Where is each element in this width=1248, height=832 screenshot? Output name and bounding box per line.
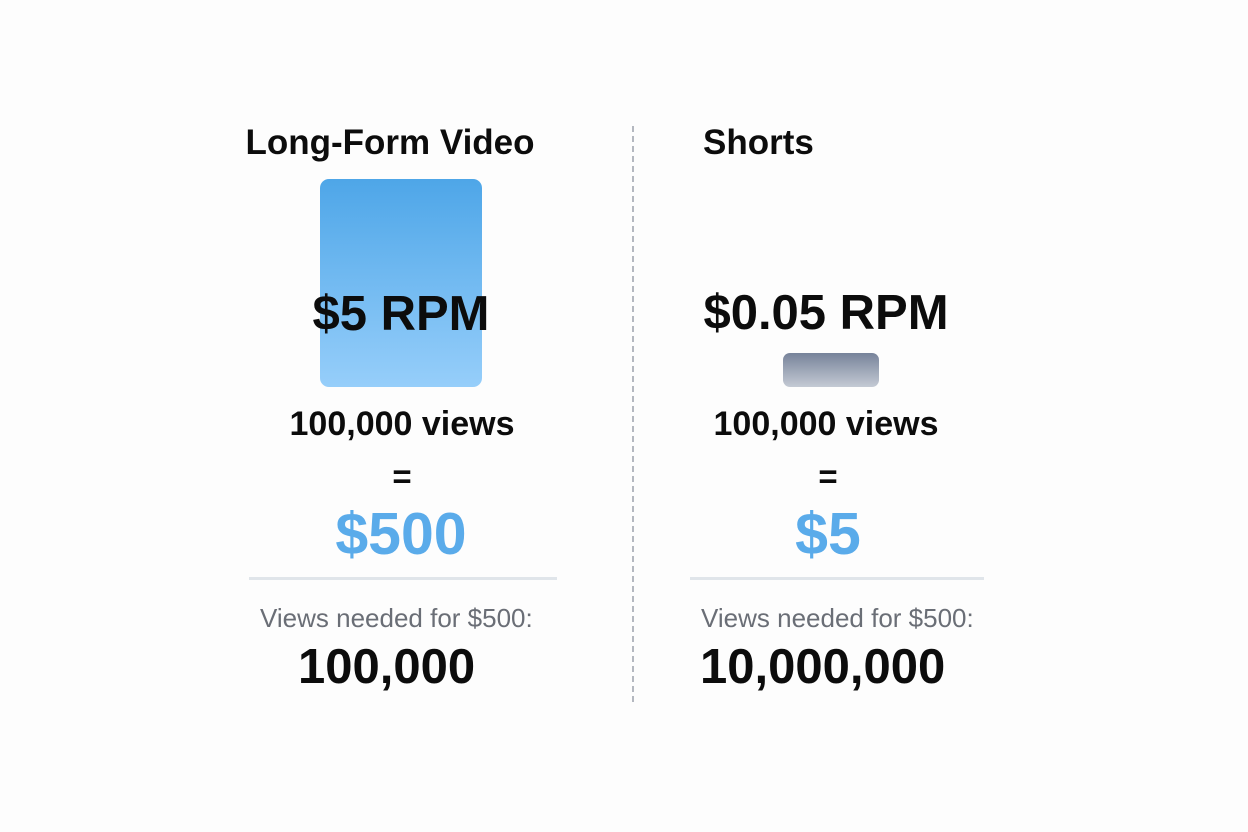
bar: shorts RPM	[783, 353, 879, 387]
views needed value: 10,000,000	[700, 640, 945, 694]
RPM label: $0.05 RPM	[703, 286, 949, 340]
heading: shorts: Shorts	[703, 123, 814, 162]
divider line	[249, 577, 557, 580]
views needed label: Views needed for $500:	[701, 603, 974, 633]
earnings: $5	[795, 501, 861, 567]
panel: long-form	[245, 123, 557, 694]
views needed label: Views needed for $500:	[260, 603, 533, 633]
views needed value: 100,000	[298, 640, 475, 694]
divider line	[690, 577, 984, 580]
bar: long-form RPM	[320, 179, 482, 387]
equals: =	[818, 458, 838, 495]
RPM label: $5 RPM	[312, 287, 490, 341]
views text: 100,000 views	[290, 405, 514, 443]
panel: shorts	[690, 123, 984, 694]
equals: =	[392, 458, 412, 495]
views text: 100,000 views	[714, 405, 938, 443]
divider	[632, 126, 634, 702]
heading: long-form: Long-Form Video	[245, 123, 535, 162]
earnings: $500	[335, 501, 467, 567]
